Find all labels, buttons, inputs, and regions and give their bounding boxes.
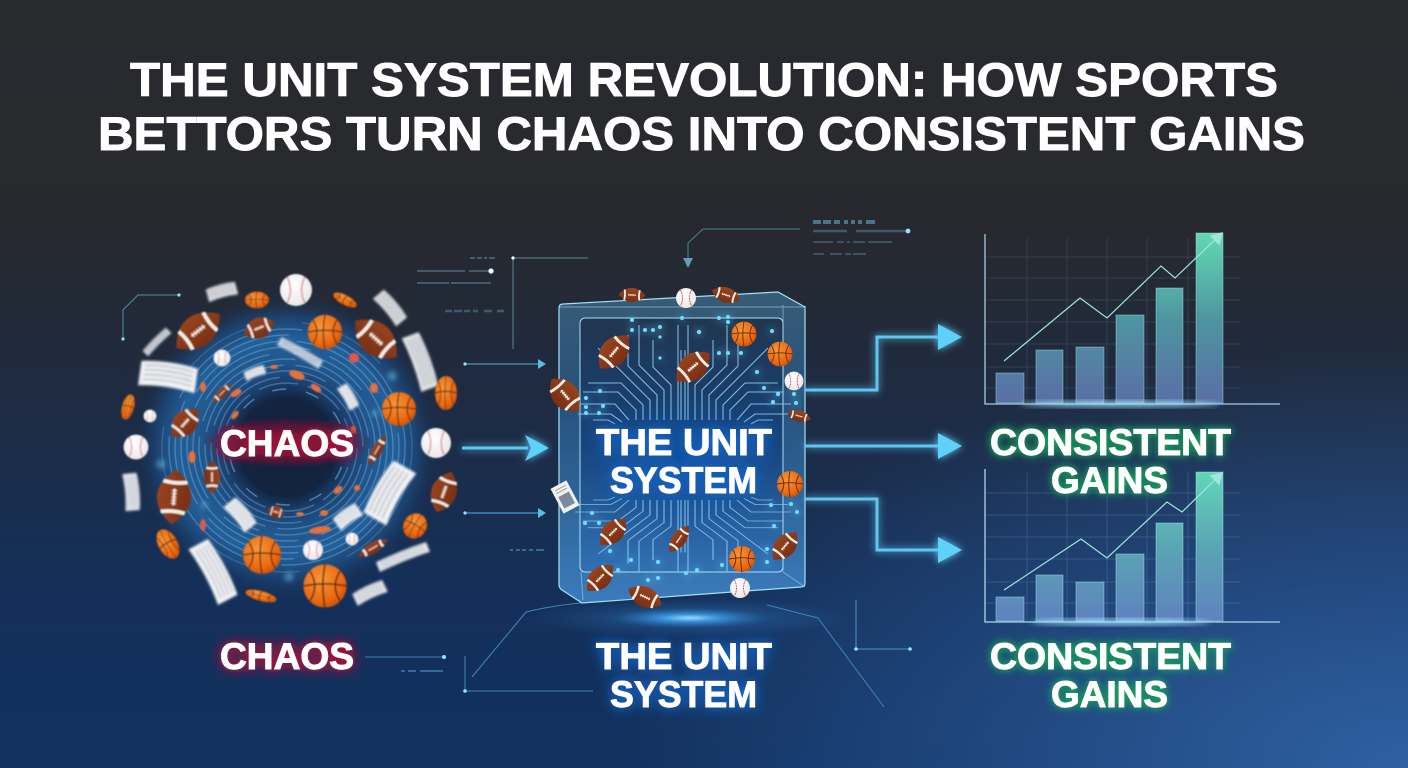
bars <box>996 472 1223 621</box>
arrow: chaos into unit system <box>462 435 549 461</box>
label: the unit system lower <box>596 636 772 715</box>
glass box outer <box>559 292 805 603</box>
label: consistent gains lower: CONSISTENT <box>990 636 1231 677</box>
circuit traces <box>575 325 791 571</box>
label: chaos in vortex: CHAOS <box>220 423 354 464</box>
grid <box>985 472 1240 622</box>
basketballs <box>119 289 457 608</box>
label: consistent gains upper <box>990 422 1231 501</box>
panel: chaos vortex <box>119 274 463 608</box>
bars <box>996 233 1223 403</box>
swirl rings <box>127 287 447 607</box>
chart: top gains <box>985 233 1280 406</box>
glowing spots <box>157 372 396 581</box>
flying bet slips <box>122 281 440 606</box>
axis glow <box>1020 402 1220 406</box>
box edges <box>559 305 805 600</box>
title: THE UNIT SYSTEM REVOLUTION: HOW SPORTS <box>130 53 1278 106</box>
axes <box>985 234 1280 404</box>
chaos centre glow <box>201 416 373 468</box>
label: consistent gains upper: CONSISTENT <box>990 422 1231 463</box>
title <box>98 53 1305 160</box>
label: chaos lower: CHAOS <box>220 636 354 677</box>
background tech connectors <box>121 222 912 707</box>
trend line <box>1004 473 1222 590</box>
basketballs on box <box>729 322 803 572</box>
label: the unit system lower: THE UNIT <box>596 636 772 677</box>
title: BETTORS TURN CHAOS INTO CONSISTENT GAINS <box>98 107 1305 160</box>
baseballs on box <box>676 288 803 598</box>
axis glow <box>1030 620 1210 624</box>
circuit nodes <box>583 315 799 582</box>
axes <box>985 469 1280 622</box>
label: the unit system in box: THE UNIT <box>596 422 772 463</box>
glass box inner panel <box>580 318 783 572</box>
grid <box>985 238 1240 404</box>
footballs <box>155 301 463 561</box>
panel: unit system box <box>530 283 850 638</box>
floor glow <box>530 598 850 638</box>
core glow <box>581 392 785 532</box>
vortex disc <box>135 295 439 599</box>
label: consistent gains lower <box>990 636 1231 715</box>
label: consistent gains lower: GAINS <box>1051 674 1168 715</box>
trend line <box>1004 233 1222 361</box>
label: the unit system in box: SYSTEM <box>610 460 757 501</box>
small debris <box>188 353 378 535</box>
label: the unit system lower: SYSTEM <box>610 674 757 715</box>
baseballs <box>124 274 451 560</box>
label: the unit system in box <box>596 422 772 501</box>
footballs on box <box>541 283 813 614</box>
bet ticket <box>550 480 580 514</box>
label: consistent gains upper: GAINS <box>1051 460 1168 501</box>
arrows: unit system to gains <box>805 324 962 563</box>
chart: bottom gains <box>985 469 1280 624</box>
